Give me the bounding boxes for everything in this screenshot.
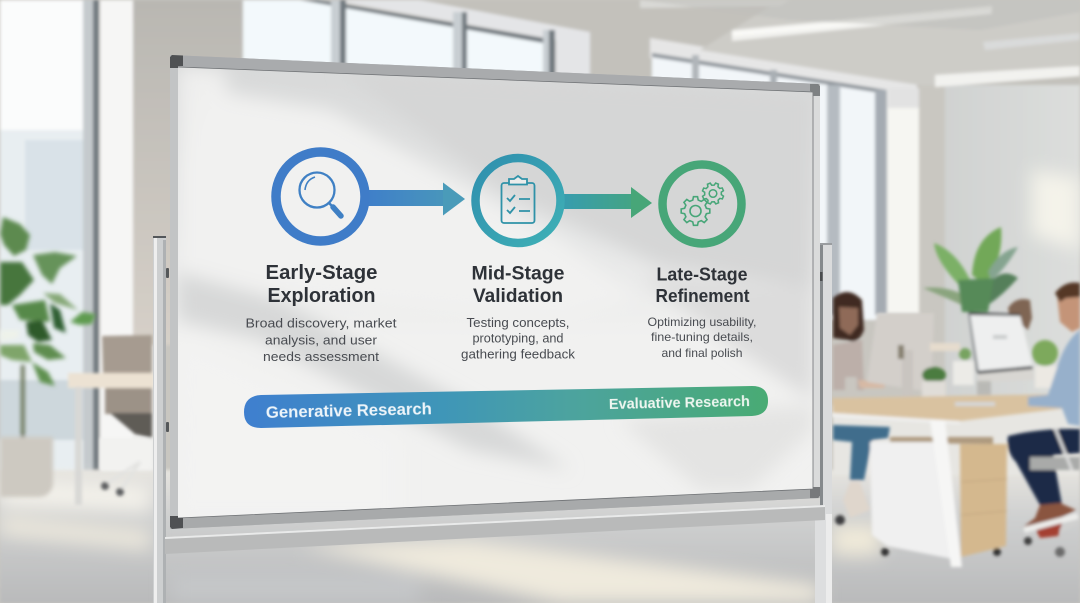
heading: late-stage refinement: Late-Stage: [656, 264, 748, 284]
label: generative research: Generative Research: [266, 400, 432, 422]
second plant pots: [953, 340, 1058, 388]
step 1: early-stage exploration: [246, 152, 397, 364]
desktop monitor: [968, 312, 1034, 395]
whiteboard: [170, 55, 820, 529]
arrow: validation to refinement: [562, 187, 652, 218]
chair and side table: [68, 335, 154, 505]
heading: early-stage exploration: Exploration: [268, 285, 376, 307]
description: late-stage: and final polish: [662, 346, 742, 360]
label: evaluative research: Evaluative Research: [609, 394, 750, 413]
heading: early-stage exploration: [266, 262, 378, 307]
left post: [153, 236, 169, 603]
corner brackets: [170, 55, 820, 529]
whiteboard stand: [153, 236, 832, 603]
background plant: [923, 227, 1018, 312]
description: late-stage: fine-tuning details,: [651, 330, 753, 344]
person in background: [1008, 299, 1032, 330]
crossbar: [165, 505, 825, 554]
right wall and ceiling: [945, 85, 1080, 405]
seated man: [1008, 282, 1080, 557]
arrow: exploration to validation: [368, 182, 465, 216]
description: late-stage: [648, 315, 756, 360]
small plant pot: [922, 367, 946, 403]
left wall: [133, 0, 243, 345]
step 3: late-stage refinement: [648, 164, 756, 360]
right office scene: [832, 227, 1080, 567]
left plant and furniture: [68, 335, 154, 505]
description: mid-stage: prototyping, and: [472, 332, 564, 346]
heading: mid-stage validation: [472, 262, 565, 307]
light and shadow on board: [178, 66, 813, 520]
description: early-stage: Broad discovery, market: [246, 316, 397, 330]
description: mid-stage: gathering feedback: [461, 348, 576, 362]
research spectrum bar: [244, 386, 768, 428]
description: early-stage: analysis, and user: [265, 332, 378, 348]
description: early-stage: [246, 316, 397, 364]
right window: [650, 38, 946, 405]
top window: [243, 0, 1080, 102]
icon: gears: [662, 164, 742, 244]
heading: late-stage refinement: [656, 264, 750, 306]
white desk pedestal and drawers: [870, 420, 1007, 567]
description: mid-stage: Testing concepts,: [466, 316, 570, 330]
heading: mid-stage validation: Validation: [473, 285, 563, 307]
wooden desk: [832, 394, 1068, 424]
heading: early-stage exploration: Early-Stage: [266, 262, 378, 284]
description: late-stage: Optimizing usability,: [648, 315, 756, 329]
description: mid-stage: [461, 316, 576, 362]
icon: magnifying glass: [276, 152, 365, 241]
desk shelf behind monitor: [930, 343, 960, 351]
heading: mid-stage validation: Mid-Stage: [472, 262, 565, 284]
board surface: [178, 67, 813, 518]
back of monitor: [867, 313, 934, 396]
right post: [815, 243, 832, 603]
description: early-stage: needs assessment: [263, 349, 379, 364]
heading: late-stage refinement: Refinement: [656, 285, 750, 306]
step 2: mid-stage validation: [461, 158, 576, 362]
icon: clipboard checklist: [476, 158, 560, 243]
left window: [0, 0, 133, 475]
board frame: [170, 55, 820, 529]
inner frame line: [178, 67, 813, 518]
icon: potted plant: [0, 217, 96, 497]
woman at desk: [833, 292, 890, 525]
floor: [0, 470, 1080, 603]
